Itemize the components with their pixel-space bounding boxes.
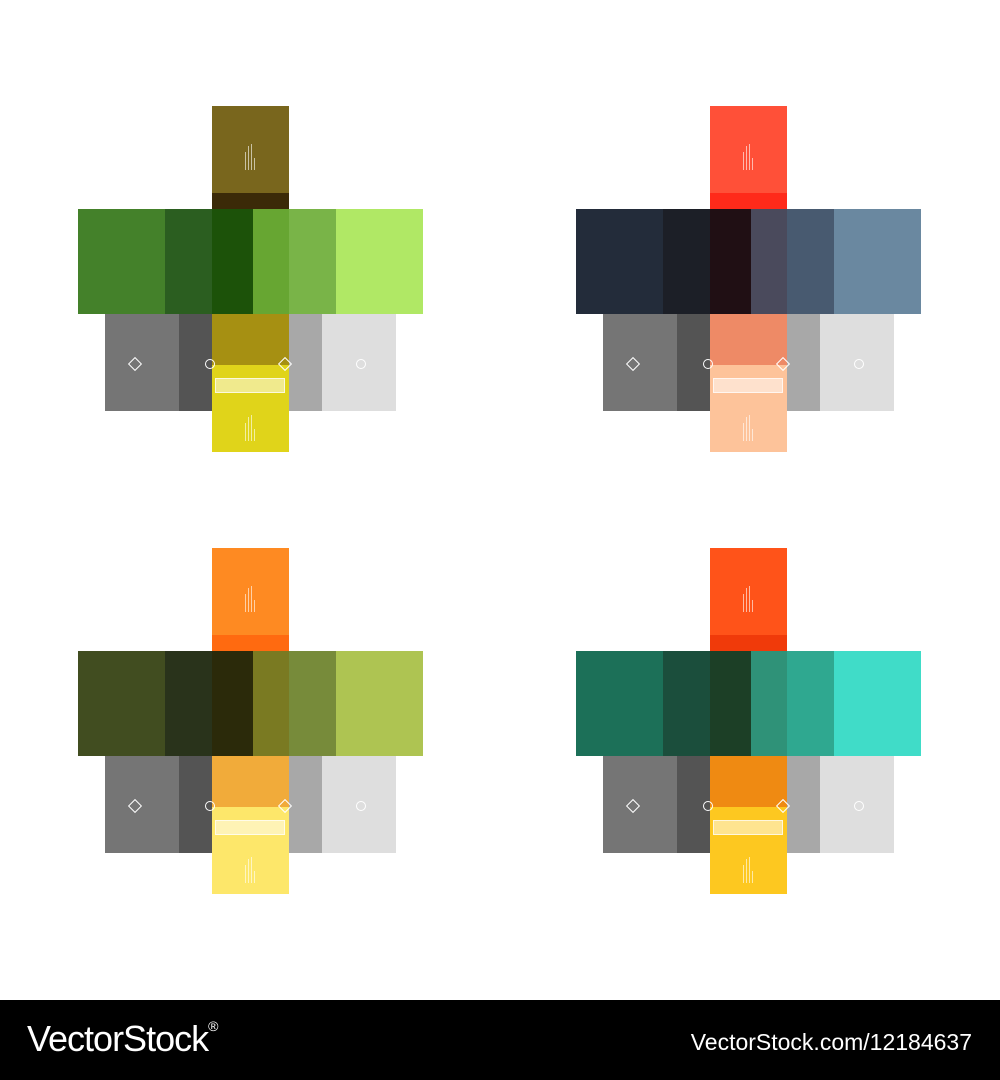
icons (128, 144, 366, 441)
panel: olive (78, 548, 423, 894)
panel: teal (576, 548, 921, 894)
icons (128, 586, 366, 883)
lower column (710, 740, 787, 894)
top tab (710, 548, 787, 651)
gray row (603, 314, 894, 411)
color band (78, 651, 423, 756)
logo text: VectorStock® (27, 1018, 217, 1059)
gray row (105, 756, 396, 853)
top tab (212, 106, 289, 209)
panel: green (78, 106, 423, 452)
icons (626, 144, 864, 441)
footer (0, 1000, 1000, 1080)
url text: VectorStock.com/12184637 (691, 1029, 972, 1055)
top tab (212, 548, 289, 651)
gray row (603, 756, 894, 853)
icons (626, 586, 864, 883)
panel: dark blue (576, 106, 921, 452)
color band (576, 651, 921, 756)
color band (78, 209, 423, 314)
gray row (105, 314, 396, 411)
lower column (212, 740, 289, 894)
color band (576, 209, 921, 314)
lower column (212, 298, 289, 452)
lower column (710, 298, 787, 452)
top tab (710, 106, 787, 209)
